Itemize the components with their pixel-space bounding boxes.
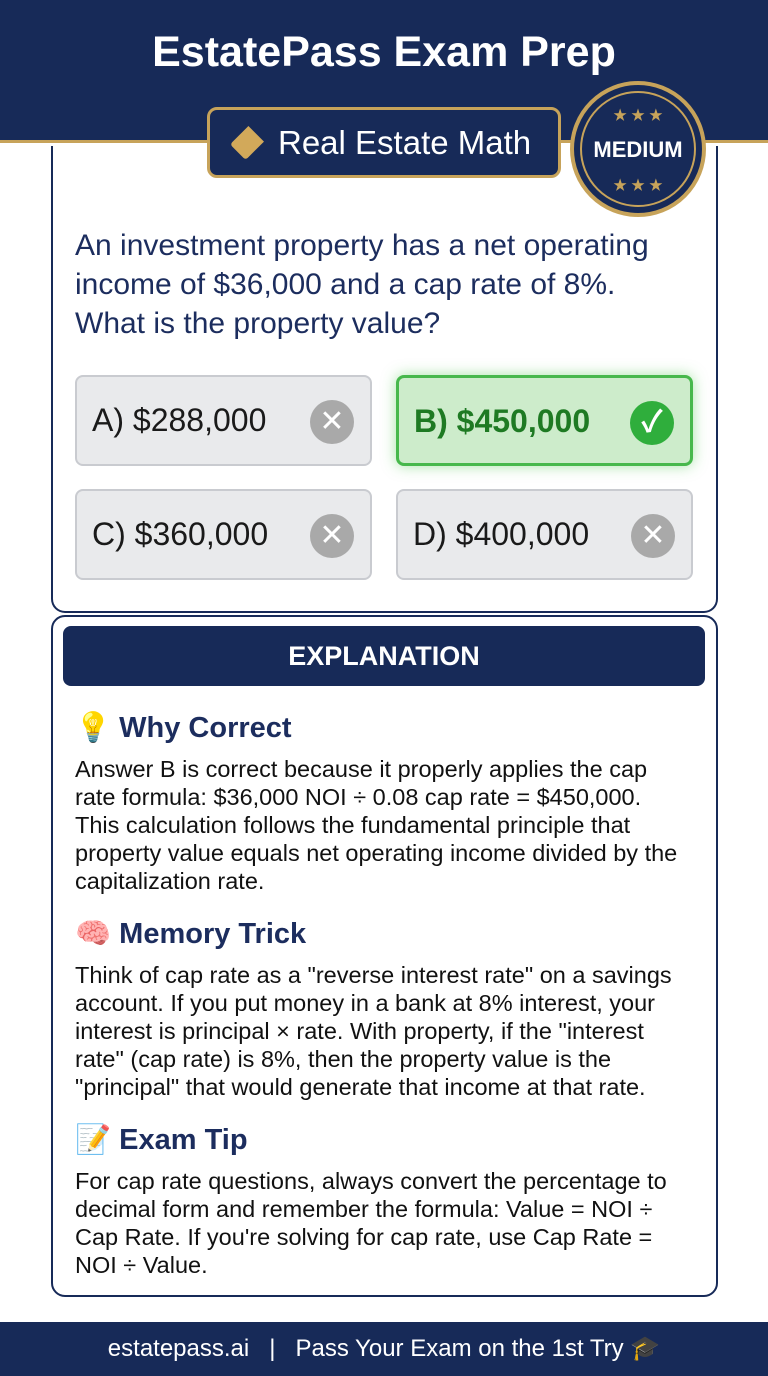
- option B correct: [396, 375, 693, 466]
- category badge: Real Estate Math: [278, 124, 531, 161]
- difficulty badge: MEDIUM: [593, 137, 683, 162]
- difficulty badge: ★ ★ ★: [613, 107, 663, 123]
- title: EstatePass Exam Prep: [152, 28, 616, 76]
- panel: explanation card: [51, 615, 718, 1297]
- footer: [0, 1322, 768, 1376]
- option B correct: ✓: [641, 406, 663, 439]
- option A: [75, 375, 372, 466]
- text: exam tip: For cap rate questions, always convert the percentage to decimal form and remember the formula: Value = NOI ÷ Cap Rate. If you're solving for cap rate, use Cap Rate = NOI ÷ Value.: [75, 1168, 667, 1278]
- heading: memory trick: 🧠 Memory Trick: [75, 918, 306, 950]
- option C: C) $360,000: [92, 516, 268, 552]
- question text: An investment property has a net operating income of $36,000 and a cap rate of 8%. What is the property value?: [75, 229, 649, 340]
- option D: D) $400,000: [413, 516, 589, 552]
- heading: exam tip: 📝 Exam Tip: [75, 1124, 248, 1156]
- option C: [75, 489, 372, 580]
- text: memory trick: Think of cap rate as a "reverse interest rate" on a savings account. If you put money in a bank at 8% interest, your interest is principal × rate. With property, if the "interest rate" (cap rate) is 8%, then the property value is the "principal" that would generate that income at that rate.: [75, 962, 672, 1100]
- icon: tag: [230, 126, 264, 160]
- option C: ✕: [319, 519, 345, 552]
- category badge: [207, 107, 561, 178]
- option D: [396, 489, 693, 580]
- explanation header: EXPLANATION: [288, 641, 480, 671]
- option D: ✕: [640, 519, 666, 552]
- difficulty badge: [570, 81, 706, 217]
- footer: estatepass.ai | Pass Your Exam on the 1st Try 🎓: [108, 1335, 660, 1362]
- option A: A) $288,000: [92, 402, 266, 438]
- difficulty badge: ★ ★ ★: [613, 177, 663, 193]
- header band: [0, 0, 768, 143]
- explanation header: [63, 626, 705, 686]
- text: why correct: Answer B is correct because it properly applies the cap rate formula: $36,000 NOI ÷ 0.08 cap rate = $450,000. This calculation follows the fundamental principle that property value equals net operating income divided by the capitalization rate.: [75, 756, 677, 894]
- heading: why correct: 💡 Why Correct: [75, 712, 292, 744]
- panel: question card: [51, 146, 718, 613]
- option B correct: B) $450,000: [414, 403, 590, 439]
- option A: ✕: [319, 405, 345, 438]
